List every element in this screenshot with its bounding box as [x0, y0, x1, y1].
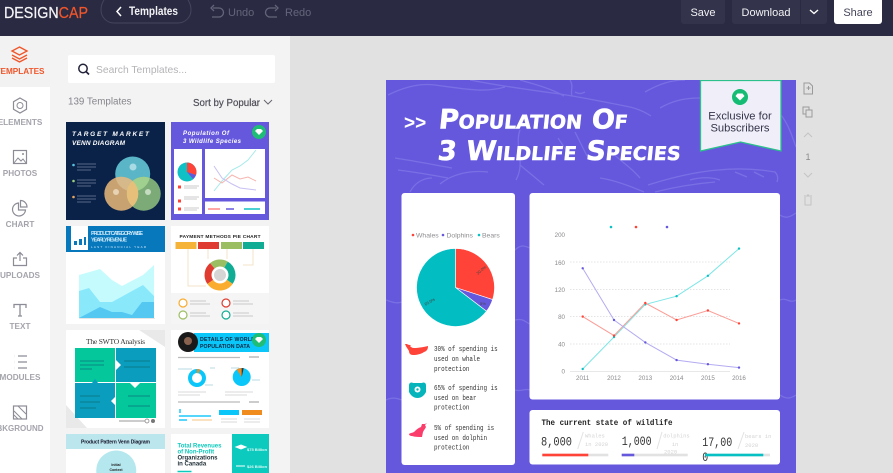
download button: [732, 0, 827, 24]
badge: exclusive for subscribers: Exclusive for: [708, 110, 772, 122]
stat: dolphins: 1,000: [622, 434, 652, 449]
badge: exclusive for subscribers: [700, 80, 781, 151]
panel: line chart: [530, 193, 780, 400]
thumbnail: total revenues of non-profit organizations: Organizations: [178, 456, 218, 462]
pie legend: Bears: [482, 232, 500, 240]
thumbnail: product pattern venn diagram: Context: [109, 468, 123, 472]
stat: whales: [541, 432, 608, 456]
stat: bears: 17,00: [702, 435, 732, 450]
stat: bears: bears in: [745, 433, 771, 440]
title: [438, 108, 680, 161]
arrow marks: >>: [404, 113, 426, 134]
gridlines: [570, 262, 730, 344]
templates back button: Templates: [129, 6, 178, 18]
x axis labels: 2016: [732, 375, 746, 382]
y axis labels: [555, 232, 566, 376]
save button: Save: [690, 7, 716, 19]
thumbnail: total revenues of non-profit organizations: $26 Billion: [247, 464, 268, 469]
stat: whales: 8,000: [541, 434, 572, 450]
x axis labels: 2014: [670, 375, 684, 382]
stat: bears: 2020: [745, 442, 758, 449]
spending item: dolphins: 5% of spending is: [434, 425, 494, 433]
sidebar item: text: TEXT: [10, 322, 30, 331]
thumbnail: product pattern venn diagram: Product Pattern Venn Diagram: [81, 440, 151, 446]
thumbnail: total revenues of non-profit organizations: [171, 434, 269, 473]
x axis labels: 2013: [638, 375, 653, 382]
x axis labels: 2015: [701, 375, 715, 382]
title: 3 Wildlife Species: [436, 136, 682, 167]
top toolbar: [0, 0, 893, 36]
icon: move down: [804, 173, 812, 177]
stat: dolphins: [622, 432, 690, 456]
background wildlife line art: [386, 80, 796, 400]
icon: duplicate page: [803, 107, 812, 117]
thumbnail: details of world population data: [171, 330, 269, 428]
spending item: whales: 30% of spending is: [434, 346, 498, 354]
thumbnail: product pattern venn diagram: Initial: [111, 463, 121, 467]
sidebar item: text: [10, 304, 30, 331]
spending item: bears: [409, 382, 498, 412]
search box: Search Templates...: [96, 64, 187, 76]
icon: move up: [804, 133, 812, 137]
thumbnail: total revenues of non-profit organizations: $75 Billion: [247, 447, 268, 452]
redo control: [266, 5, 311, 19]
sidebar item: modules: MODULES: [0, 373, 41, 382]
y axis labels: 0: [562, 368, 566, 376]
undo control: Undo: [228, 7, 254, 19]
sidebar item: photos: [3, 150, 38, 178]
thumbnail: total revenues of non-profit organizations: of Non-Profit: [178, 450, 214, 456]
share button: [834, 0, 882, 24]
spending item: whales: [405, 344, 498, 374]
thumbnail: swot analysis: The SWTO Analysis: [86, 337, 145, 346]
y axis labels: 200: [555, 232, 566, 239]
stat: whales: Whales: [585, 432, 605, 440]
y axis labels: 80: [558, 314, 566, 321]
y axis labels: 40: [558, 342, 566, 348]
thumbnail: product category wise: PRODUCT CATEGORY WISE: [91, 231, 143, 237]
title: Population Of: [437, 105, 630, 135]
spending item: dolphins: protection: [434, 444, 469, 452]
series: bears: [582, 247, 740, 370]
sidebar item: uploads: UPLOADS: [0, 271, 41, 280]
spending item: whales: used on whale: [434, 356, 480, 364]
sidebar item: chart: CHART: [6, 220, 34, 229]
spending item: dolphins: used on dolphin: [434, 435, 487, 443]
thumbnail: details of world population data: DETAILS OF WORLD: [200, 337, 255, 343]
share button: Share: [843, 7, 873, 19]
thumbnail: total revenues of non-profit organizations: in Canada: [178, 462, 207, 468]
thumbnail: total revenues of non-profit organizations: Total Revenues: [178, 444, 222, 450]
template count: 139 Templates: [68, 96, 132, 108]
stat: whales: in 2020: [585, 441, 608, 448]
sidebar item: chart: [6, 200, 34, 229]
pie chart: [417, 248, 495, 326]
sidebar item: elements: [0, 98, 43, 127]
series: whales: [582, 302, 740, 337]
pie chart: 30.0%: [475, 264, 488, 276]
stat: bears: 0: [702, 450, 708, 465]
x axis labels: 2011: [576, 375, 590, 382]
y axis labels: 120: [555, 287, 566, 294]
page tools column: [803, 83, 812, 205]
stat: bears: [702, 432, 771, 461]
thumbnail: target market venn diagram: VENN DIAGRAM: [72, 140, 126, 147]
icon: add page: [804, 83, 812, 94]
x axis labels: [576, 376, 746, 380]
save button: [681, 0, 725, 24]
pie legend: Whales: [416, 232, 439, 240]
legend markers: [610, 226, 668, 228]
search box: [68, 55, 275, 83]
thumbnail: population of wildlife species: 3 Wildlife Species: [183, 139, 242, 145]
thumbnail: product category wise: [66, 226, 165, 324]
stat: dolphins: 2020: [664, 448, 677, 456]
icon: dolphin: [409, 423, 427, 437]
pie legend: [412, 233, 500, 239]
panel heading: The current state of wildlife: [542, 418, 672, 428]
logo: DESIGNCAP: [4, 5, 88, 22]
badge: exclusive for subscribers: Subscribers: [710, 122, 770, 134]
sidebar item: templates: [0, 47, 45, 76]
thumbnail: payment methods pie chart: PAYMENT METHODS PIE CHART: [180, 234, 261, 240]
y axis labels: 160: [555, 260, 566, 267]
spending item: bears: used on bear: [434, 395, 476, 403]
thumbnail: product category wise: LAST FINANCIAL YEAR: [91, 245, 147, 249]
download button: Download: [742, 7, 790, 19]
series: dolphins: [582, 267, 740, 369]
thumbnail: target market venn diagram: [66, 122, 165, 220]
canvas: infographic page: [386, 80, 796, 473]
icon: delete: [804, 195, 812, 205]
undo control: [211, 5, 254, 19]
thumbnail: population of wildlife species: [171, 122, 269, 220]
panel: current state of wildlife: [530, 410, 780, 465]
page number: 1: [805, 152, 811, 162]
sort dropdown: Sort by Popular: [193, 98, 261, 109]
thumbnail: product category wise: YEARLY REVENUE: [91, 238, 127, 244]
templates back button: [101, 0, 191, 23]
template browser panel: [50, 36, 290, 473]
sidebar item: modules: [0, 356, 41, 382]
icon: bear: [409, 382, 426, 398]
thumbnail: target market venn diagram: TARGET MARKET: [72, 131, 150, 138]
x axis labels: 2012: [607, 375, 621, 382]
stat: dolphins: in: [672, 441, 678, 448]
stat: dolphins: dolphins: [663, 432, 690, 440]
spending item: bears: protection: [434, 404, 469, 412]
thumbnail: swot analysis: [66, 330, 165, 428]
thumbnail: product pattern venn diagram: [66, 434, 165, 473]
thumbnail: details of world population data: POPULATION DATA: [200, 344, 250, 350]
spending item: bears: 65% of spending is: [434, 385, 498, 393]
spending item: whales: protection: [434, 366, 469, 374]
pie legend: Dolphins: [446, 232, 474, 240]
panel: pie chart and spending: [402, 193, 515, 465]
left icon sidebar: [0, 36, 50, 473]
sidebar item: photos: PHOTOS: [3, 169, 38, 178]
thumbnail: payment methods pie chart: [171, 226, 269, 324]
sidebar item: uploads: [0, 252, 41, 280]
sidebar item: background: [0, 406, 44, 433]
thumbnail: population of wildlife species: Population Of: [183, 131, 230, 137]
pie chart: 65.0%: [424, 296, 436, 307]
pie chart: 5%: [480, 301, 486, 306]
redo control: Redo: [285, 7, 311, 19]
spending item: dolphins: [409, 423, 494, 452]
icon: whale: [405, 344, 428, 355]
